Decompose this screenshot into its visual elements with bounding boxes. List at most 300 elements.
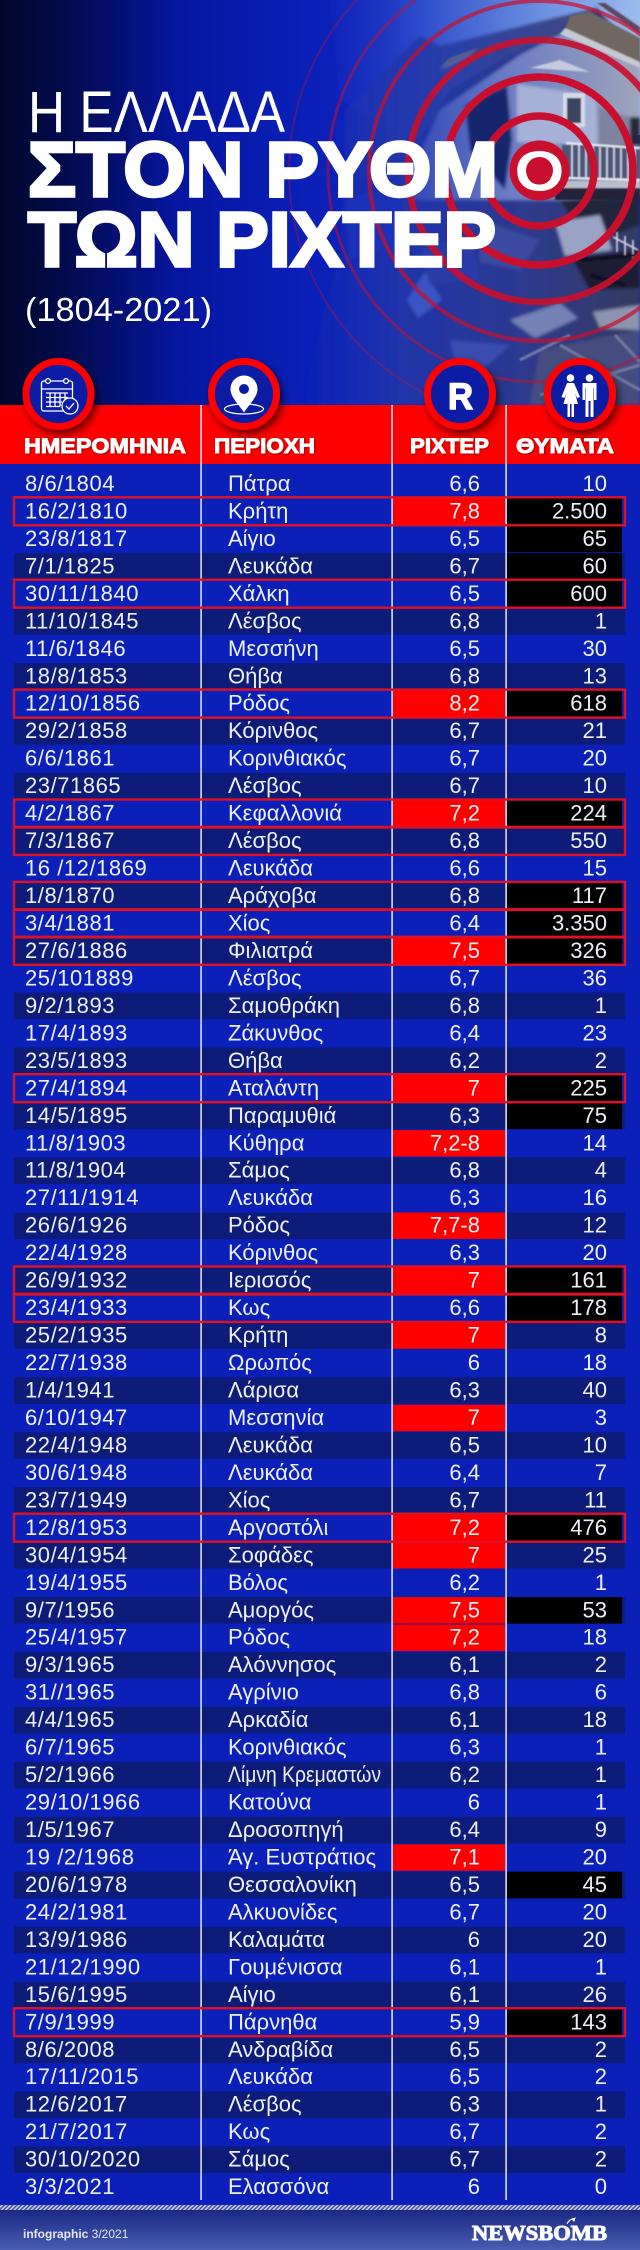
row: 7/3/1867: 550	[570, 828, 607, 853]
row: 11/8/1903: Κύθηρα	[228, 1130, 305, 1155]
row: 9/2/1893: 9/2/1893	[25, 993, 115, 1018]
row: 23/5/1893	[14, 1048, 625, 1074]
row: 29/2/1858	[14, 718, 625, 745]
row: 21/12/1990: 1	[595, 1954, 607, 1979]
row: 11/8/1903: 11/8/1903	[25, 1130, 126, 1155]
row: 24/2/1981: 6,7	[449, 1899, 480, 1924]
row: 19 /2/1968	[25, 1844, 607, 1871]
row: 16 /12/1869: 6,6	[449, 856, 480, 881]
row: 11/8/1904: 6,8	[449, 1158, 480, 1183]
row: 30/10/2020: 2	[595, 2147, 607, 2172]
row: 11/6/1846	[25, 636, 607, 661]
row: 24/2/1981: 20	[583, 1899, 607, 1924]
target centre	[526, 157, 553, 184]
row: 12/10/1856: Ρόδος	[228, 691, 290, 716]
row: 30/10/2020: Σάμος	[228, 2147, 290, 2172]
row: 29/10/1966: Κατούνα	[228, 1790, 312, 1815]
row: 9/7/1956	[14, 1597, 625, 1624]
row: 17/4/1893	[25, 1020, 607, 1045]
row: 25/101889	[25, 965, 607, 990]
row: 26/9/1932: 7	[468, 1268, 480, 1293]
row: 15/6/1995: Αίγιο	[228, 1982, 276, 2007]
row: 15/6/1995: 15/6/1995	[25, 1982, 128, 2007]
row: 30/11/1840: Χάλκη	[228, 581, 290, 606]
row: 31//1965: 6	[595, 1680, 607, 1705]
row: 29/10/1966	[25, 1790, 607, 1815]
row: 18/8/1853: 6,8	[449, 663, 480, 688]
row: 20/6/1978: 20/6/1978	[25, 1872, 128, 1897]
heading text: victims: ΘΥΜΑΤΑ	[516, 434, 614, 458]
row: 12/10/1856: 8,2	[449, 691, 480, 716]
row: 22/7/1938: Ωρωπός	[228, 1350, 312, 1375]
row: 30/10/2020: 30/10/2020	[25, 2147, 141, 2172]
row: 17/11/2015: 17/11/2015	[25, 2064, 139, 2089]
row: 5/2/1966: 6,2	[449, 1762, 480, 1787]
row: 30/4/1954: 30/4/1954	[25, 1542, 128, 1567]
row: 9/2/1893: 1	[595, 993, 607, 1018]
row: 3/3/2021: Ελασσόνα	[228, 2174, 329, 2199]
row: 19/4/1955: 19/4/1955	[25, 1570, 128, 1595]
icon: woman and man	[548, 362, 612, 426]
row: 17/11/2015: 6,5	[449, 2064, 480, 2089]
row: 22/4/1928: 20	[583, 1240, 607, 1265]
row: 3/4/1881	[25, 910, 622, 937]
row: 25/4/1957	[25, 1625, 607, 1651]
row: 30/4/1954: 7	[468, 1542, 480, 1567]
row: 26/6/1926: 7,7-8	[430, 1213, 480, 1238]
row: 27/11/1914: 6,3	[449, 1185, 480, 1210]
row: 12/8/1953: 12/8/1953	[25, 1515, 128, 1540]
row: 3/4/1881: Χίος	[228, 911, 270, 936]
row: 23/4/1933: 178	[570, 1295, 607, 1320]
row: 4/4/1965: 6,1	[449, 1707, 480, 1732]
row: 22/7/1938: 18	[583, 1350, 607, 1375]
row: 27/4/1894: 7	[468, 1075, 480, 1100]
row: 26/9/1932: 26/9/1932	[25, 1268, 128, 1293]
row: 22/4/1948: 6,5	[449, 1432, 480, 1457]
row: 11/8/1904: Σάμος	[228, 1158, 290, 1183]
column heading: victims	[516, 362, 614, 458]
row: 19 /2/1968: 7,1	[449, 1844, 480, 1869]
row: 23/8/1817: 23/8/1817	[25, 526, 128, 551]
row: 17/4/1893: 6,4	[449, 1020, 480, 1045]
row: 23/8/1817: 6,5	[449, 526, 480, 551]
logo: Newsbomb: NEWSBOMB	[472, 2221, 607, 2245]
row: 7/3/1867: 7/3/1867	[25, 828, 115, 853]
row: 12/8/1953: 476	[570, 1515, 607, 1540]
row: 4/2/1867: Κεφαλλονιά	[228, 801, 342, 826]
row: 3/3/2021: 3/3/2021	[25, 2174, 115, 2199]
row: 12/10/1856	[25, 691, 622, 717]
row: 18/8/1853: 18/8/1853	[25, 663, 128, 688]
row: 6/6/1861: Κορινθιακός	[228, 746, 346, 771]
row: 17/4/1893: Ζάκυνθος	[228, 1020, 323, 1045]
row: 3/4/1881: 3/4/1881	[25, 911, 115, 936]
row: 30/10/2020: 6,7	[449, 2147, 480, 2172]
row: 27/6/1886: 7,5	[449, 938, 480, 963]
row: 6/6/1861: 20	[583, 746, 607, 771]
row: 31//1965	[25, 1680, 607, 1705]
row: 22/7/1938: 6	[468, 1350, 480, 1375]
row: 7/1/1825: 60	[583, 553, 607, 578]
row: 9/7/1956: 7,5	[449, 1597, 480, 1622]
row: 14/5/1895: 6,3	[449, 1103, 480, 1128]
row: 9/3/1965: Αλόννησος	[228, 1652, 336, 1677]
row: 1/5/1967: 9	[595, 1817, 607, 1842]
icon: location pin	[212, 362, 276, 426]
row: 23/8/1817	[25, 526, 622, 552]
credit: infographic date: infographic 3/2021	[23, 2227, 129, 2241]
row: 9/7/1956: 9/7/1956	[25, 1597, 115, 1622]
row: 6/6/1861	[25, 746, 607, 771]
row: 3/3/2021: 0	[595, 2174, 607, 2199]
title line 3: ΤΩΝ ΡΙΧΤΕΡ	[28, 197, 496, 283]
row: 25/4/1957: 7,2	[449, 1625, 480, 1650]
row: 31//1965: Αγρίνιο	[228, 1680, 299, 1705]
row: 23/4/1933: 23/4/1933	[25, 1295, 128, 1320]
row: 21/7/2017: 2	[595, 2119, 607, 2144]
row: 25/2/1935: 8	[595, 1323, 607, 1348]
row: 23/8/1817: 65	[583, 526, 607, 551]
table rows	[14, 471, 625, 2199]
row: 24/2/1981	[25, 1899, 607, 1924]
row: 1/4/1941: 1/4/1941	[25, 1378, 115, 1403]
row: 30/6/1948	[25, 1460, 607, 1485]
row: 9/7/1956: Αμοργός	[228, 1597, 314, 1622]
row: 1/4/1941	[14, 1377, 625, 1404]
row: 7/1/1825: 7/1/1825	[25, 553, 115, 578]
row: 25/2/1935	[14, 1322, 625, 1349]
row: 23/8/1817: Αίγιο	[228, 526, 276, 551]
row: 1/5/1967: 1/5/1967	[25, 1817, 115, 1842]
row: 18/8/1853	[14, 663, 625, 690]
row: 11/8/1904: 11/8/1904	[25, 1158, 126, 1183]
row: 20/6/1978: 45	[583, 1872, 607, 1897]
row: 27/6/1886: 27/6/1886	[25, 938, 128, 963]
row: 23/7/1949: 6,7	[449, 1487, 480, 1512]
row: 11/6/1846: 30	[583, 636, 607, 661]
row: 15/6/1995: 6,1	[449, 1982, 480, 2007]
row: 8/6/1804: 6,6	[449, 471, 480, 496]
row: 7/9/1999: Πάρνηθα	[228, 2009, 318, 2034]
row: 23/7/1949: Χίος	[228, 1487, 270, 1512]
row: 17/11/2015	[25, 2064, 607, 2089]
row: 23/71865: 10	[583, 773, 607, 798]
row: 8/6/2008: 8/6/2008	[25, 2037, 115, 2062]
row: 13/9/1986: 13/9/1986	[25, 1927, 128, 1952]
row: 29/2/1858: Κόρινθος	[228, 718, 318, 743]
row: 8/6/1804: 10	[583, 471, 607, 496]
row: 26/6/1926: 12	[583, 1213, 607, 1238]
row: 4/4/1965: Αρκαδία	[228, 1707, 309, 1732]
row: 9/7/1956: 53	[583, 1597, 607, 1622]
row: 22/4/1928: 6,3	[449, 1240, 480, 1265]
row: 8/6/2008: 2	[595, 2037, 607, 2062]
row: 13/9/1986: 20	[583, 1927, 607, 1952]
highlight frames on deadliest earthquakes	[14, 497, 625, 2036]
row: 23/71865	[14, 773, 625, 799]
row: 7/1/1825: 6,7	[449, 553, 480, 578]
row: 6/7/1965: Κορινθιακός	[228, 1735, 346, 1760]
row: 30/6/1948: 6,4	[449, 1460, 480, 1485]
row: 22/4/1928: 22/4/1928	[25, 1240, 128, 1265]
row: 11/10/1845: 6,8	[449, 608, 480, 633]
row: 30/4/1954	[14, 1542, 625, 1569]
row: 21/7/2017: 21/7/2017	[25, 2119, 128, 2144]
row: 30/10/2020	[14, 2146, 625, 2173]
row: 27/11/1914: Λευκάδα	[228, 1185, 313, 1210]
row: 22/4/1948: 22/4/1948	[25, 1432, 128, 1457]
row: 25/2/1935: Κρήτη	[228, 1323, 288, 1348]
row: 6/7/1965: 1	[595, 1735, 607, 1760]
row: 22/4/1948	[14, 1432, 625, 1459]
table header band	[0, 405, 640, 464]
row: 24/2/1981: Αλκυονίδες	[228, 1899, 337, 1924]
row: 19 /2/1968: Άγ. Ευστράτιος	[228, 1844, 376, 1869]
row: 12/6/2017: 1	[595, 2092, 607, 2117]
subtitle: period: (1804-2021)	[25, 291, 212, 328]
row: 9/2/1893: 6,8	[449, 993, 480, 1018]
row: 26/9/1932: 161	[570, 1268, 607, 1293]
row: 11/10/1845: Λέσβος	[228, 608, 302, 633]
row: 11/8/1903: 7,2-8	[430, 1130, 480, 1155]
icon: calendar	[26, 362, 91, 426]
row: 7/3/1867	[14, 828, 625, 854]
row: 16/2/1810	[25, 498, 622, 525]
row: 23/5/1893: Θήβα	[228, 1048, 283, 1073]
row: 5/2/1966: Λίμνη Κρεμαστών	[228, 1762, 381, 1787]
row: 16/2/1810: Κρήτη	[228, 498, 288, 523]
row: 23/5/1893: 23/5/1893	[25, 1048, 128, 1073]
row: 23/7/1949: 11	[584, 1487, 607, 1512]
row: 6/10/1947: 3	[595, 1405, 607, 1430]
row: 21/7/2017: Κως	[228, 2119, 270, 2144]
row: 7/3/1867: Λέσβος	[228, 828, 302, 853]
row: 16/2/1810: 7,8	[449, 498, 480, 523]
row: 7/1/1825	[14, 553, 625, 580]
row: 11/10/1845	[14, 608, 625, 635]
row: 11/6/1846: 6,5	[449, 636, 480, 661]
row: 20/6/1978: Θεσσαλονίκη	[228, 1872, 357, 1897]
row: 4/2/1867: 4/2/1867	[25, 801, 115, 826]
red target disc	[510, 140, 570, 200]
row: 4/2/1867: 224	[570, 801, 607, 826]
row: 7/9/1999	[25, 2009, 622, 2036]
row: 6/10/1947: 6/10/1947	[25, 1405, 128, 1430]
seismic rings	[289, 0, 640, 421]
row: 3/3/2021: 6	[468, 2174, 480, 2199]
row: 11/6/1846: 11/6/1846	[25, 636, 126, 661]
row: 29/10/1966: 29/10/1966	[25, 1790, 141, 1815]
row: 4/2/1867	[25, 800, 622, 827]
row: 27/4/1894: Αταλάντη	[228, 1075, 319, 1100]
row: 14/5/1895	[14, 1103, 625, 1129]
row: 14/5/1895: Παραμυθιά	[228, 1103, 337, 1128]
row: 6/7/1965: 6/7/1965	[25, 1735, 115, 1760]
row: 11/6/1846: Μεσσήνη	[228, 636, 319, 661]
row: 18/8/1853: Θήβα	[228, 663, 283, 688]
row: 4/4/1965: 4/4/1965	[25, 1707, 115, 1732]
row: 5/2/1966	[14, 1762, 625, 1788]
row: 19/4/1955: Βόλος	[228, 1570, 288, 1595]
row: 3/3/2021	[25, 2174, 607, 2199]
row: 22/7/1938	[25, 1350, 607, 1375]
banner: gradient background with earthquake photo	[0, 0, 640, 405]
row: 25/4/1957: 18	[583, 1625, 607, 1650]
row: 29/2/1858: 21	[583, 718, 607, 743]
row: 27/11/1914: 27/11/1914	[25, 1185, 139, 1210]
row: 25/101889: 6,7	[449, 965, 480, 990]
row: 11/10/1845: 1	[595, 608, 607, 633]
row: 9/2/1893	[14, 993, 625, 1019]
row: 27/6/1886	[14, 938, 625, 964]
row: 7/1/1825: Λευκάδα	[228, 553, 313, 578]
row: 9/3/1965: 2	[595, 1652, 607, 1677]
row: 7/9/1999: 7/9/1999	[25, 2009, 115, 2034]
row: 19 /2/1968: 20	[583, 1844, 607, 1869]
row: 22/4/1948: 10	[583, 1432, 607, 1457]
row: 27/11/1914	[25, 1185, 607, 1210]
row: 23/71865: Λέσβος	[228, 773, 302, 798]
row: 24/2/1981: 24/2/1981	[25, 1899, 128, 1924]
title	[25, 80, 564, 328]
row: 8/6/1804: Πάτρα	[228, 471, 291, 496]
row: 8/6/1804: 8/6/1804	[25, 471, 115, 496]
row: 30/11/1840: 600	[570, 581, 607, 606]
row: 8/6/2008: Ανδραβίδα	[228, 2037, 334, 2062]
row: 26/6/1926	[14, 1212, 625, 1239]
row: 12/8/1953	[25, 1515, 622, 1541]
row: 23/4/1933: 6,6	[449, 1295, 480, 1320]
row: 22/4/1928	[25, 1240, 607, 1265]
row: 6/6/1861: 6/6/1861	[25, 746, 115, 771]
row: 6/7/1965: 6,3	[449, 1735, 480, 1760]
row: 21/12/1990	[25, 1954, 607, 1979]
row: 14/5/1895: 14/5/1895	[25, 1103, 128, 1128]
row: 23/5/1893: 2	[595, 1048, 607, 1073]
row: 21/12/1990: 6,1	[449, 1954, 480, 1979]
row: 3/4/1881: 6,4	[449, 911, 480, 936]
row: 20/6/1978	[14, 1872, 625, 1898]
row: 30/11/1840: 30/11/1840	[25, 581, 139, 606]
heading text: richter: ΡΙΧΤΕΡ	[410, 434, 489, 458]
title line 2: ΣΤΟΝ ΡΥΘΜ	[28, 127, 498, 213]
row: 9/3/1965	[14, 1652, 625, 1679]
row: 12/6/2017: 6,3	[449, 2092, 480, 2117]
row: 1/8/1870: 6,8	[449, 883, 480, 908]
row: 12/8/1953: Αργοστόλι	[228, 1515, 329, 1540]
column heading: region	[212, 362, 315, 458]
row: 7/9/1999: 5,9	[449, 2009, 480, 2034]
row: 4/2/1867: 7,2	[449, 801, 480, 826]
row: 8/6/1804	[25, 471, 607, 496]
row: 15/6/1995	[14, 1982, 625, 2008]
row: 29/2/1858: 29/2/1858	[25, 718, 128, 743]
row: 30/6/1948: 30/6/1948	[25, 1460, 128, 1485]
icon: letter R: R	[448, 376, 473, 417]
row: 11/8/1904	[14, 1158, 625, 1184]
row: 22/7/1938: 22/7/1938	[25, 1350, 128, 1375]
row: 1/8/1870: 117	[572, 883, 607, 908]
row: 16 /12/1869: 16 /12/1869	[25, 856, 147, 881]
row: 27/6/1886: 326	[570, 938, 607, 963]
row: 12/10/1856: 618	[570, 691, 607, 716]
row: 27/4/1894: 27/4/1894	[25, 1075, 128, 1100]
row: 17/11/2015: Λευκάδα	[228, 2064, 313, 2089]
row: 9/3/1965: 9/3/1965	[25, 1652, 115, 1677]
row: 19/4/1955: 6,2	[449, 1570, 480, 1595]
row: 5/2/1966: 1	[595, 1762, 607, 1787]
row: 1/8/1870: 1/8/1870	[25, 883, 115, 908]
row: 23/71865: 6,7	[449, 773, 480, 798]
row: 16 /12/1869	[25, 856, 607, 881]
row: 23/71865: 23/71865	[25, 773, 121, 798]
row: 23/7/1949	[14, 1487, 625, 1514]
row: 22/4/1948: Λευκάδα	[228, 1432, 313, 1457]
row: 1/5/1967: 6,4	[449, 1817, 480, 1842]
row: 25/101889: 25/101889	[25, 965, 134, 990]
title line 2: Ο	[515, 139, 564, 203]
row: 6/6/1861: 6,7	[449, 746, 480, 771]
row: 20/6/1978: 6,5	[449, 1872, 480, 1897]
row: 11/10/1845: 11/10/1845	[25, 608, 139, 633]
row: 17/4/1893: 23	[583, 1020, 607, 1045]
row: 23/4/1933: Κως	[228, 1295, 270, 1320]
row: 21/7/2017: 6,7	[449, 2119, 480, 2144]
row: 29/10/1966: 1	[595, 1790, 607, 1815]
row: 4/4/1965: 18	[583, 1707, 607, 1732]
column heading: richter	[410, 362, 492, 458]
row: 1/5/1967	[14, 1817, 625, 1843]
row: 17/4/1893: 17/4/1893	[25, 1020, 128, 1045]
row: 26/6/1926: 26/6/1926	[25, 1213, 128, 1238]
row: 1/8/1870	[14, 883, 625, 909]
row: 9/2/1893: Σαμοθράκη	[228, 993, 340, 1018]
row: 25/4/1957: Ρόδος	[228, 1625, 290, 1650]
row: 12/10/1856: 12/10/1856	[25, 691, 141, 716]
row: 1/4/1941: 6,3	[449, 1378, 480, 1403]
row: 16/2/1810: 2.500	[552, 498, 607, 523]
row: 13/9/1986: 6	[468, 1927, 480, 1952]
column heading: date	[24, 362, 186, 458]
row: 12/6/2017	[14, 2092, 625, 2118]
row: 6/10/1947	[25, 1405, 607, 1431]
row: 23/5/1893: 6,2	[449, 1048, 480, 1073]
row: 7/3/1867: 6,8	[449, 828, 480, 853]
row: 21/12/1990: 21/12/1990	[25, 1954, 141, 1979]
hatched divider	[0, 2205, 640, 2210]
row: 25/101889: 36	[583, 965, 607, 990]
title line 1: Η ΕΛΛΑΔΑ	[28, 80, 285, 145]
heading text: region: ΠΕΡΙΟΧΗ	[214, 434, 315, 458]
row: 11/8/1903	[25, 1130, 607, 1157]
row: 25/101889: Λέσβος	[228, 965, 302, 990]
row: 26/9/1932	[14, 1267, 625, 1294]
row: 14/5/1895: 75	[583, 1103, 607, 1128]
row: 16/2/1810: 16/2/1810	[25, 498, 128, 523]
row: 30/6/1948: 7	[595, 1460, 607, 1485]
row: 13/9/1986	[14, 1927, 625, 1953]
footer band	[0, 2210, 640, 2250]
row: 30/11/1840: 6,5	[449, 581, 480, 606]
row: 12/6/2017: 12/6/2017	[25, 2092, 128, 2117]
row: 6/7/1965	[25, 1735, 607, 1760]
row: 1/4/1941: 40	[583, 1378, 607, 1403]
row: 31//1965: 6,8	[449, 1680, 480, 1705]
row: 1/8/1870: Αράχοβα	[228, 883, 317, 908]
row: 30/11/1840	[25, 581, 622, 607]
row: 31//1965: 31//1965	[25, 1680, 115, 1705]
